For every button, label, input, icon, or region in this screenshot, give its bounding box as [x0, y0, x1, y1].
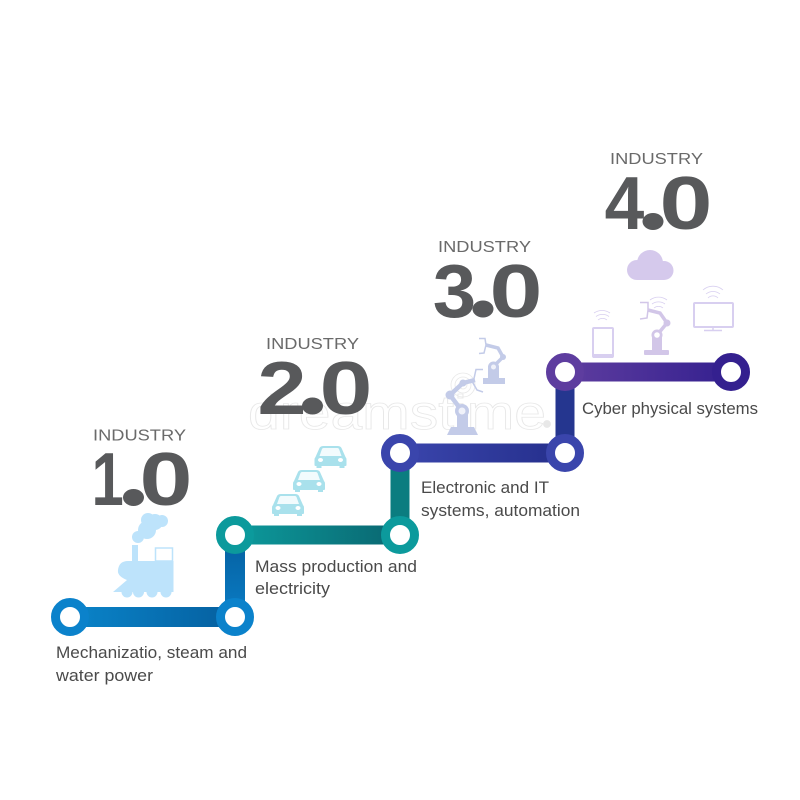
label: cyber: Cyber physical systems	[582, 400, 758, 418]
heading: industry 1.0	[92, 428, 192, 522]
heading: industry 4.0	[605, 151, 712, 246]
icon: car 3	[314, 446, 346, 468]
icon: car 2	[293, 470, 325, 492]
icon: large robot arm	[446, 370, 483, 435]
heading: industry 4.0: INDUSTRY	[610, 151, 703, 168]
heading: industry 3.0	[433, 239, 542, 334]
icon: car 1	[272, 494, 304, 516]
heading: industry 4.0: .	[648, 200, 656, 233]
heading: industry 2.0	[257, 336, 372, 431]
label: mechanization	[55, 644, 247, 685]
icon: monitor	[694, 286, 733, 331]
node 1	[56, 602, 84, 632]
heading: industry 2.0: 2	[257, 347, 307, 430]
icon: cloud	[627, 250, 674, 280]
heading: industry 3.0: 0	[490, 250, 542, 334]
label: mass production	[255, 558, 417, 598]
heading: industry 3.0: INDUSTRY	[438, 239, 531, 256]
watermark: dreamstime	[248, 387, 546, 440]
stepped timeline path	[56, 358, 746, 632]
label: mass production: Mass production and	[255, 558, 417, 576]
watermark	[248, 373, 550, 440]
label: mass production: electricity	[255, 580, 331, 598]
heading: industry 4.0: 4	[605, 162, 645, 245]
label: mechanization: water power	[55, 667, 154, 685]
node 8	[716, 358, 746, 386]
heading: industry 2.0: .	[308, 385, 316, 418]
heading: industry 1.0: INDUSTRY	[93, 428, 186, 444]
label: electronic: systems, automation	[421, 502, 580, 520]
heading: industry 2.0: 0	[320, 347, 372, 431]
label: electronic	[421, 479, 580, 520]
label: mechanization: Mechanizatio, steam and	[56, 644, 247, 662]
heading: industry 3.0: .	[478, 288, 486, 321]
node 7	[550, 358, 580, 386]
icon: steam train	[113, 513, 174, 598]
icon: small robot arm	[479, 338, 506, 384]
heading: industry 1.0: .	[129, 476, 137, 509]
node 3	[220, 520, 250, 550]
node 6	[550, 438, 580, 468]
heading: industry 4.0: 0	[660, 162, 712, 246]
node 5	[386, 438, 414, 468]
icon: robot arm with wifi	[640, 297, 670, 355]
icon: tablet	[593, 310, 613, 358]
heading: industry 1.0: 0	[140, 438, 192, 522]
heading: industry 2.0: INDUSTRY	[266, 336, 359, 353]
heading: industry 1.0: 1	[92, 438, 124, 522]
heading: industry 3.0: 3	[433, 250, 476, 334]
node 2	[220, 602, 250, 632]
label: electronic: Electronic and IT	[421, 479, 549, 497]
node 4	[386, 520, 414, 550]
